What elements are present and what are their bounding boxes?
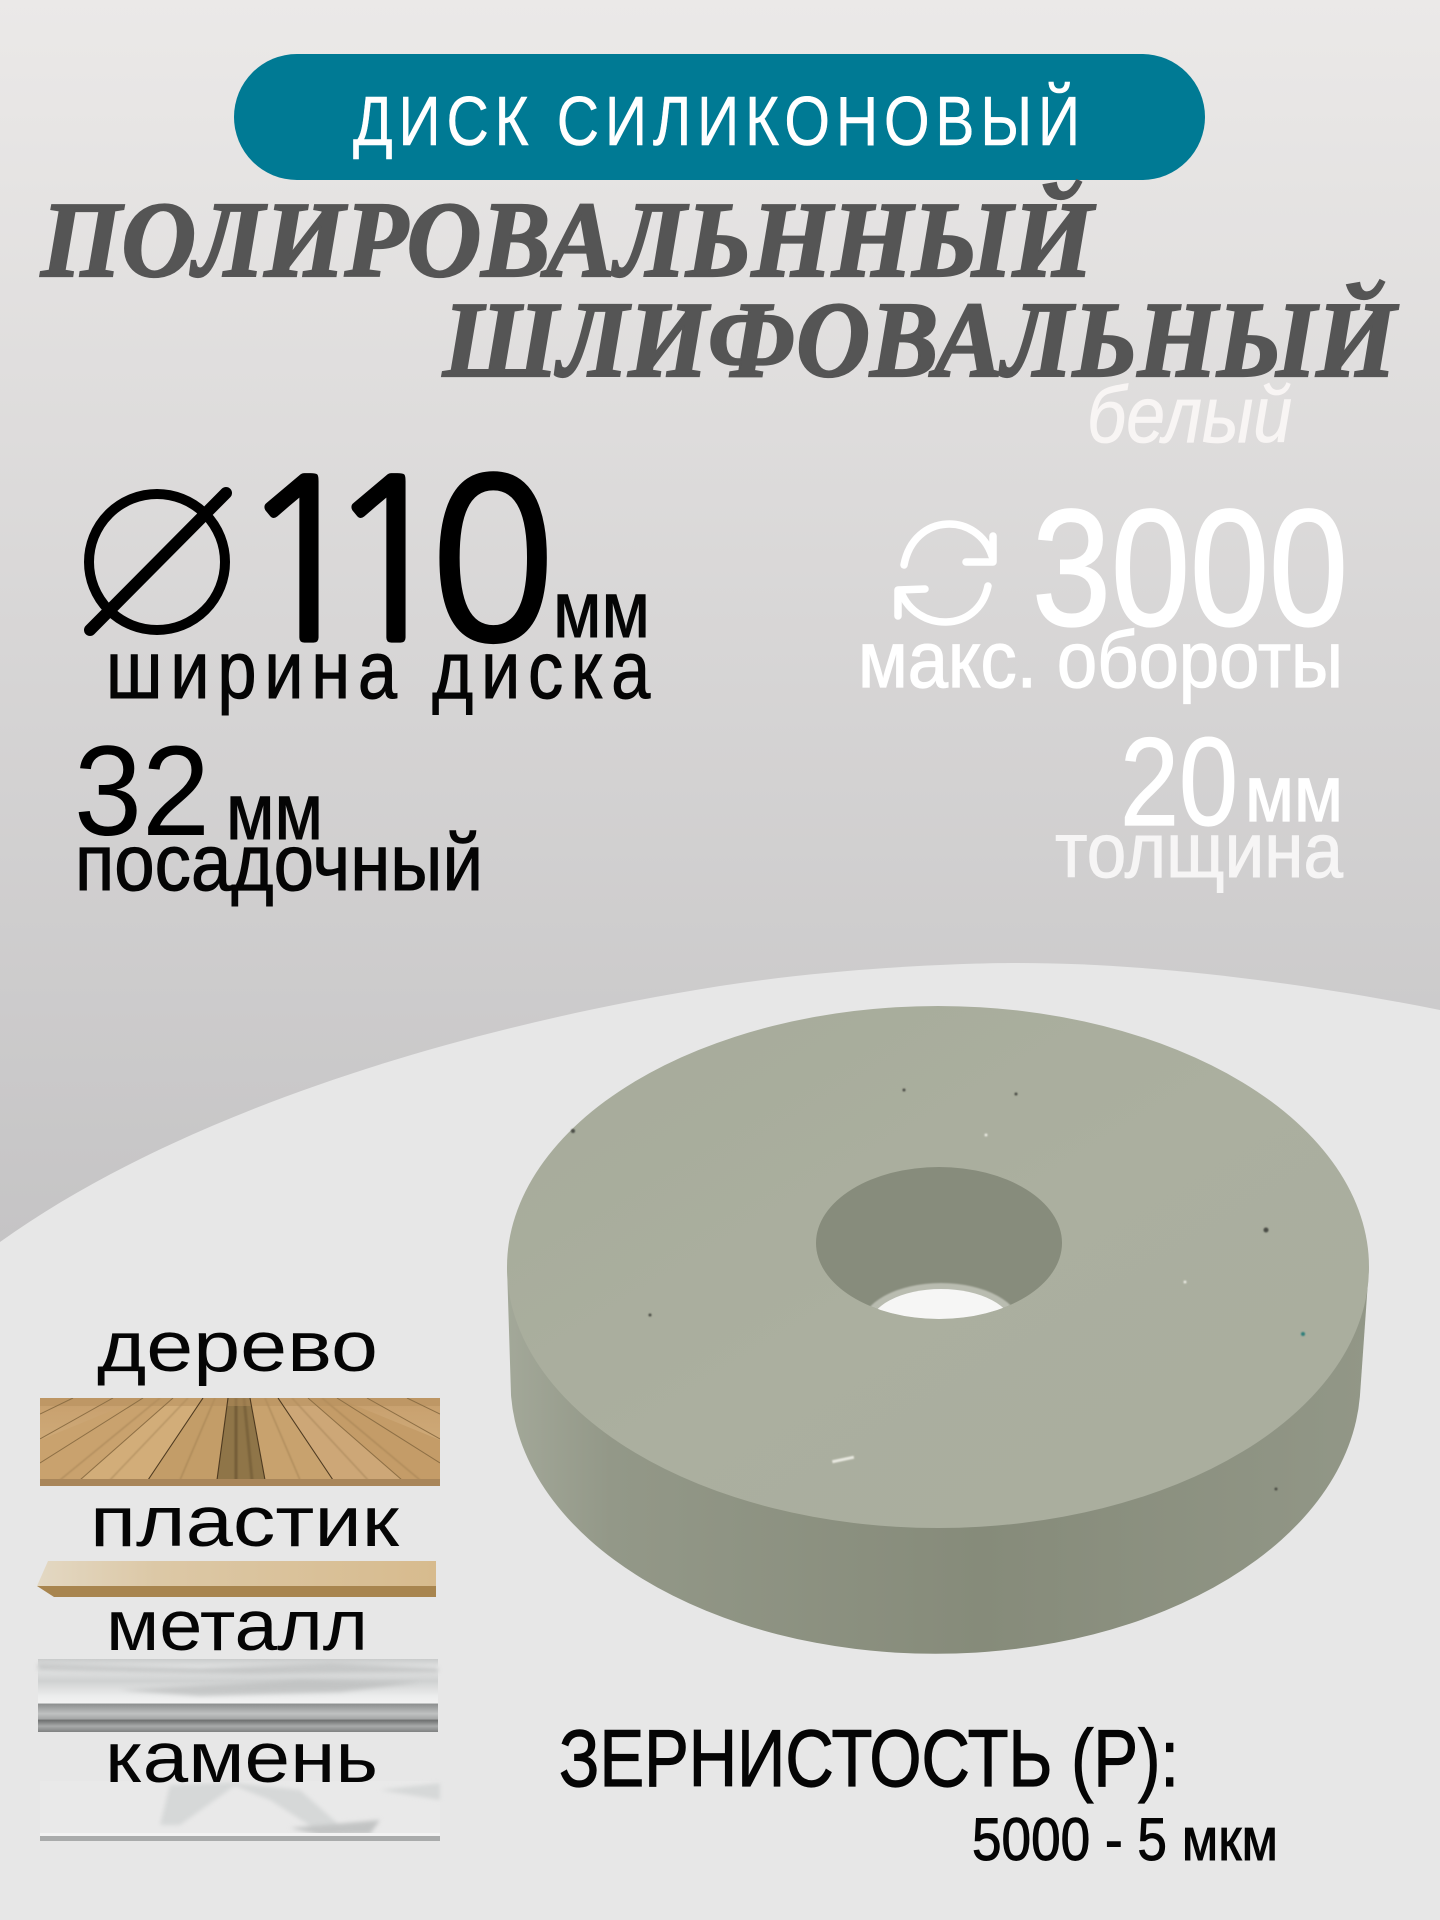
disc top face bbox=[507, 1006, 1369, 1528]
value 110: 0 bbox=[429, 450, 556, 672]
label: stone: камень bbox=[105, 1719, 378, 1798]
value 110: 1 bbox=[235, 450, 369, 672]
grit value: 5000 - 5 мкм bbox=[972, 1806, 1278, 1873]
label: wood: дерево bbox=[97, 1308, 378, 1387]
swatch: wood planks bbox=[40, 1398, 440, 1486]
unit mm: мм bbox=[1245, 749, 1343, 838]
pill title text: ДИСК СИЛИКОНОВЫЙ bbox=[353, 81, 1086, 160]
label: plastic: пластик bbox=[90, 1483, 400, 1562]
value 110: 1 bbox=[322, 450, 456, 672]
value 20: 20 bbox=[1120, 713, 1238, 852]
label: metal: металл bbox=[106, 1587, 368, 1666]
swatch: plastic board bbox=[37, 1561, 436, 1597]
grit heading: ЗЕРНИСТОСТЬ (Р): bbox=[559, 1714, 1179, 1804]
disc centre hole bbox=[816, 1167, 1062, 1319]
value 110 bbox=[235, 450, 556, 672]
materials list bbox=[37, 1308, 440, 1841]
silicone disc illustration bbox=[507, 1006, 1369, 1654]
value 32: 32 bbox=[74, 720, 210, 863]
swatch: stone slab bbox=[40, 1781, 440, 1841]
background gradient bbox=[0, 0, 1440, 1300]
curved light bottom panel bbox=[0, 963, 1440, 1920]
icon: diameter symbol bbox=[89, 493, 226, 630]
heading: polishing: ПОЛИРОВАЛЬННЫЙ bbox=[40, 180, 1096, 300]
thickness caption: толщина bbox=[1055, 806, 1344, 894]
heading: grinding: ШЛИФОВАЛЬНЫЙ bbox=[442, 280, 1399, 400]
width caption: ширина диска bbox=[106, 625, 658, 716]
spec: disc width bbox=[89, 450, 658, 716]
spec: thickness bbox=[1055, 713, 1344, 894]
rpm caption: макс. обороты bbox=[858, 615, 1343, 704]
bore caption: посадочный bbox=[75, 818, 483, 907]
unit mm: мм bbox=[553, 565, 650, 654]
swatch: metal profile bbox=[38, 1659, 438, 1732]
colour label: белый bbox=[1087, 370, 1292, 459]
icon: rotation arrows bbox=[898, 524, 993, 622]
disc surface specks bbox=[571, 1088, 1305, 1490]
value 3000: 3000 bbox=[1032, 476, 1348, 661]
title pill bbox=[234, 54, 1205, 180]
spec: max rpm bbox=[858, 476, 1348, 704]
spec: bore bbox=[74, 720, 483, 907]
unit mm: мм bbox=[226, 767, 323, 856]
disc side wall bbox=[507, 1267, 1369, 1654]
